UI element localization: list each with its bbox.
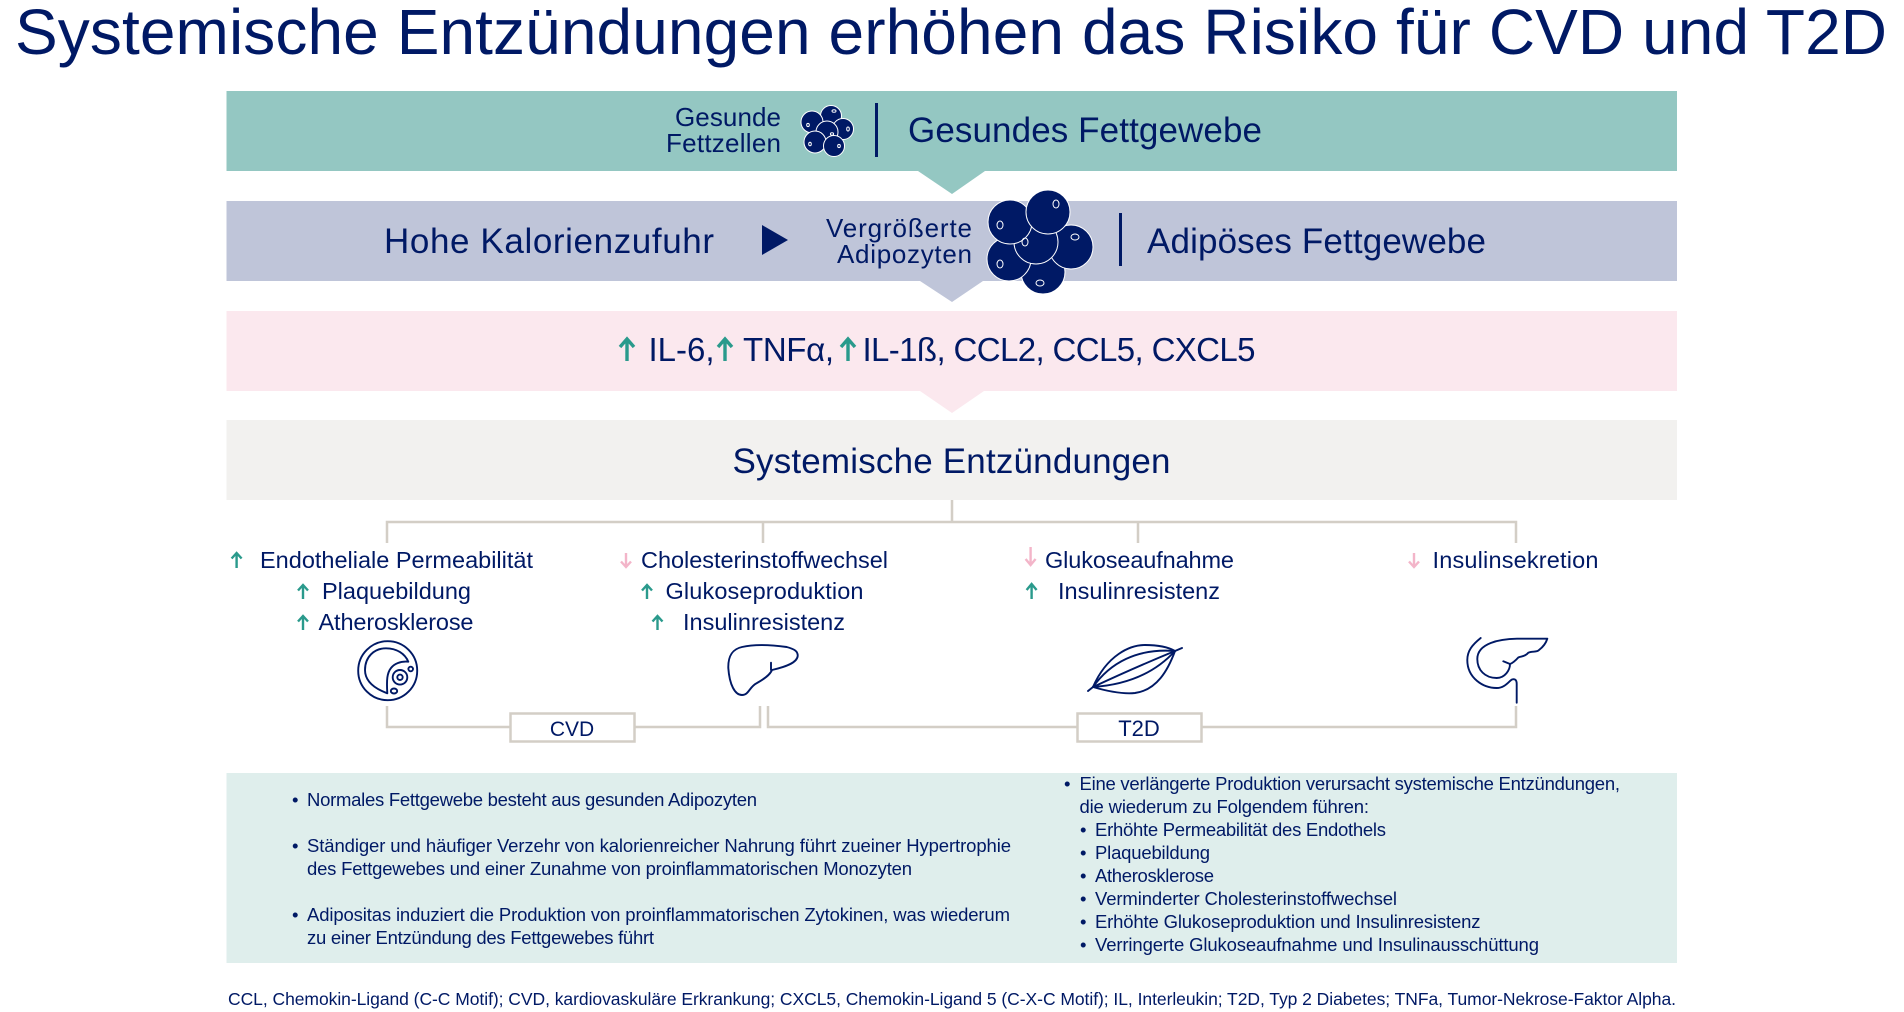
text: left column xyxy=(292,789,1011,948)
box: T2D xyxy=(1078,714,1202,742)
text: left column: Normales Fettgewebe besteht aus gesunden Adipozyten xyxy=(307,789,757,810)
label: healthy fat cells: Fettzellen xyxy=(666,128,781,158)
text: left column: Adipositas induziert die Produktion von proinflammatorischen Zytokinen, was wiederum xyxy=(307,904,1010,925)
label: healthy fat cells xyxy=(666,102,781,158)
connector: CVD xyxy=(387,706,760,727)
box: CVD xyxy=(510,714,634,742)
text: right column: Plaquebildung xyxy=(1095,842,1210,863)
heading: obese adipose tissue: Adipöses Fettgewebe xyxy=(1147,222,1486,261)
effects: liver: Insulinresistenz xyxy=(683,609,845,635)
tree connector xyxy=(387,500,1516,543)
text: right column: • xyxy=(1080,934,1086,955)
box: T2D: T2D xyxy=(1118,716,1160,741)
icon: enlarged adipocytes xyxy=(987,190,1093,294)
text: left column: • xyxy=(292,835,298,856)
effects: muscle: Insulinresistenz xyxy=(1058,578,1220,604)
heading: healthy adipose tissue: Gesundes Fettgewebe xyxy=(908,111,1262,150)
text: right column: • xyxy=(1080,842,1086,863)
text: left column: Ständiger und häufiger Verzehr von kalorienreicher Nahrung führt zueiner Hypertrophie xyxy=(307,835,1011,856)
effects: muscle: Glukoseaufnahme xyxy=(1045,547,1234,573)
icon: liver xyxy=(728,645,798,695)
effects: endothelium: Plaquebildung xyxy=(322,578,471,604)
effects: liver: Glukoseproduktion xyxy=(666,578,864,604)
icon: artery xyxy=(358,641,417,700)
text: right column: • xyxy=(1080,911,1086,932)
effects: endothelium xyxy=(232,547,533,635)
text: right column: die wiederum zu Folgendem führen: xyxy=(1080,796,1369,817)
panel: adipose tissue xyxy=(226,190,1677,302)
box: CVD: CVD xyxy=(550,718,594,741)
text: right column: Verringerte Glukoseaufnahme und Insulinausschüttung xyxy=(1095,934,1539,955)
icon: healthy fat cells xyxy=(801,106,854,156)
text: left column: • xyxy=(292,789,298,810)
icon: up arrow IL-6 xyxy=(620,339,634,361)
text: IL-6: IL-6, xyxy=(648,331,714,368)
label: enlarged adipocytes: Vergrößerte xyxy=(826,213,972,243)
arrow: right xyxy=(762,225,788,255)
text: right column: • xyxy=(1064,773,1070,794)
text: left column: • xyxy=(292,904,298,925)
text: left column: des Fettgewebes und einer Zunahme von proinflammatorischen Monozyten xyxy=(307,858,912,879)
effects: endothelium: Endotheliale Permeabilität xyxy=(260,547,533,573)
label: healthy fat cells: Gesunde xyxy=(675,102,781,132)
panel: cytokines xyxy=(226,311,1677,413)
text: right column: Atherosklerose xyxy=(1095,865,1214,886)
text: right column: • xyxy=(1080,865,1086,886)
icon: up arrow TNF xyxy=(718,339,732,361)
label: enlarged adipocytes: Adipozyten xyxy=(837,239,972,269)
text: right column: Eine verlängerte Produktion verursacht systemische Entzündungen, xyxy=(1080,773,1620,794)
effects: muscle xyxy=(1026,547,1234,604)
label: enlarged adipocytes xyxy=(826,213,972,269)
text: right column: • xyxy=(1080,819,1086,840)
text: right column: Erhöhte Permeabilität des Endothels xyxy=(1095,819,1386,840)
heading: systemic inflammation: Systemische Entzündungen xyxy=(732,442,1170,481)
effects: liver xyxy=(621,547,888,635)
text: right column: Verminderter Cholesterinstoffwechsel xyxy=(1095,888,1397,909)
text: right column xyxy=(1064,773,1620,955)
panel: explanation xyxy=(226,773,1677,963)
text: left column: zu einer Entzündung des Fettgewebes führt xyxy=(307,927,654,948)
effects: endothelium: Atherosklerose xyxy=(318,609,474,635)
icon: up arrow IL-1 xyxy=(841,339,855,361)
effects: pancreas: Insulinsekretion xyxy=(1432,547,1598,573)
icon: muscle xyxy=(1088,645,1182,693)
footnote: CCL, Chemokin-Ligand (C-C Motif); CVD, kardiovaskuläre Erkrankung; CXCL5, Chemokin-Ligand 5 (C-X-C Motif); IL, Interleukin; T2D, Typ 2 Diabetes; TNFa, Tumor-Nekrose-Faktor Alpha. xyxy=(228,989,1676,1009)
connector: T2D xyxy=(768,706,1516,727)
panel: healthy adipose tissue xyxy=(226,91,1677,194)
text: right column: Erhöhte Glukoseproduktion und Insulinresistenz xyxy=(1095,911,1480,932)
text: high calorie intake: Hohe Kalorienzufuhr xyxy=(384,222,714,261)
text: TNF alpha: TNFα, xyxy=(743,331,834,368)
icon: pancreas xyxy=(1467,638,1547,703)
panel: systemic inflammation xyxy=(226,420,1677,500)
text: right column: • xyxy=(1080,888,1086,909)
text: other cytokines: IL-1ß, CCL2, CCL5, CXCL5 xyxy=(862,331,1256,368)
effects: liver: Cholesterinstoffwechsel xyxy=(641,547,888,573)
